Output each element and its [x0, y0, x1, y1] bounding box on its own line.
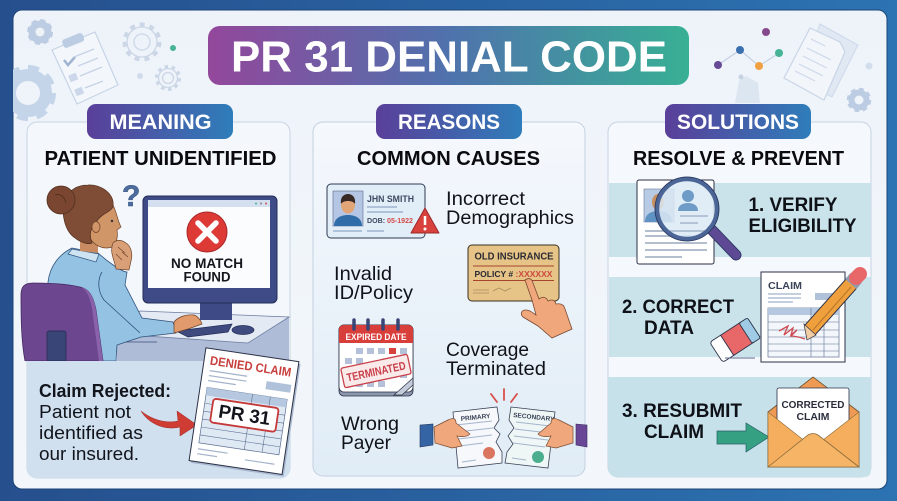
icon: large gear [3, 68, 53, 118]
denied claim document: PR 31 [217, 402, 272, 430]
chair [21, 283, 103, 361]
icon: claim form: CLAIM [768, 280, 802, 292]
decorative icons: top right [714, 24, 872, 110]
desk [117, 311, 289, 361]
icon: expired calendar [339, 320, 413, 396]
right document [505, 407, 555, 468]
step 1 text: ELIGIBILITY [748, 215, 856, 237]
text: incorrect demographics: Demographics [446, 207, 574, 229]
denied claim document: DENIED CLAIM [209, 354, 292, 380]
step 3 text: 3. RESUBMIT [622, 400, 742, 422]
icon: eraser [710, 318, 761, 362]
pill heading: meaning: MEANING [110, 110, 212, 134]
icon: right gear [848, 90, 870, 110]
text: invalid id/policy: ID/Policy [334, 282, 413, 304]
monitor: FOUND [184, 268, 230, 284]
dot [170, 45, 176, 51]
icon: outline gear [124, 24, 160, 60]
heading: patient unidentified: PATIENT UNIDENTIFIED [44, 148, 276, 170]
pill heading: reasons [376, 104, 522, 139]
icon: clipboard [52, 32, 118, 104]
callout text: identified as [39, 422, 143, 443]
dot [738, 74, 744, 80]
icon: id card [327, 184, 439, 238]
pill heading: meaning [87, 104, 233, 139]
callout text: Patient not [39, 401, 131, 422]
denied claim document [189, 348, 301, 477]
icon: envelope [768, 377, 859, 467]
decorative icons: top left [3, 21, 180, 118]
callout text: Claim Rejected: [39, 380, 171, 401]
terminated stamp: TERMINATED [346, 360, 407, 385]
icon: old insurance card [468, 245, 559, 301]
icon: network dots [714, 28, 783, 70]
panel: meaning [21, 104, 301, 478]
title: PR 31 DENIAL CODE [231, 32, 667, 82]
dot [866, 62, 872, 70]
left hand [434, 419, 470, 448]
screen message: NO MATCH [171, 255, 243, 271]
step 2 text: DATA [644, 317, 694, 339]
icon: id card: DOB: 05-1922 [367, 216, 413, 225]
illustration: woman at computer [21, 180, 289, 361]
right document: SECONDARY [513, 412, 555, 423]
title banner [208, 26, 689, 85]
right hand [538, 419, 573, 448]
text: incorrect demographics: Incorrect [446, 188, 526, 210]
icon: envelope: CORRECTED [782, 399, 845, 411]
icon: red x [187, 212, 227, 252]
icon: document with magnifier [637, 177, 736, 264]
keyboard and mouse [176, 324, 254, 337]
pill heading: reasons: REASONS [398, 110, 500, 134]
icon: torn documents and hands [420, 389, 587, 468]
callout text: our insured. [39, 443, 139, 464]
heading: resolve and prevent: RESOLVE & PREVENT [633, 148, 844, 170]
icon: small gear [29, 21, 51, 43]
icon: outline gear small [156, 66, 180, 90]
left document: PRIMARY [460, 413, 491, 423]
step 2 text: 2. CORRECT [622, 296, 734, 318]
icon: question mark: ? [122, 180, 140, 213]
band: step 3 [608, 377, 871, 477]
text: invalid id/policy: Invalid [334, 263, 392, 285]
woman [47, 185, 202, 361]
heading: common causes: COMMON CAUSES [357, 148, 540, 170]
icon: id card: JHN SMITH [367, 194, 414, 204]
icon: pencil [804, 274, 860, 340]
icon: warning triangle [411, 208, 439, 233]
pill heading: solutions [665, 104, 811, 139]
icon: faint pin [735, 76, 760, 103]
dot [137, 73, 143, 79]
text: coverage terminated: Terminated [446, 358, 546, 380]
band: step 1 [609, 183, 871, 257]
step 1 text: 1. VERIFY [748, 194, 838, 216]
step 3 text: CLAIM [644, 421, 704, 443]
text: coverage terminated: Coverage [446, 339, 529, 361]
pill heading: solutions: SOLUTIONS [677, 110, 799, 134]
icon: claim form [761, 272, 845, 362]
icon: expired calendar: EXPIRED DATE [346, 332, 406, 342]
left document [453, 407, 502, 468]
monitor [143, 196, 277, 320]
band: step 2 [609, 277, 871, 357]
text: wrong payer: Wrong [341, 413, 399, 435]
icon: envelope: CLAIM [796, 411, 830, 423]
eraser shadow line [725, 357, 755, 359]
text: wrong payer: Payer [341, 432, 391, 454]
callout: claim rejected [27, 348, 301, 478]
panel: solutions [608, 104, 871, 477]
icon: old insurance card: OLD INSURANCE [474, 250, 554, 262]
panel: reasons [313, 104, 587, 476]
pr 31 stamp [210, 399, 279, 432]
icon: documents [784, 24, 858, 100]
arrow: red [141, 411, 197, 436]
icon: arrow [717, 423, 769, 452]
icon: pointing hand [521, 279, 572, 338]
icon: old insurance card: POLICY # :XXXXXX [474, 269, 553, 279]
